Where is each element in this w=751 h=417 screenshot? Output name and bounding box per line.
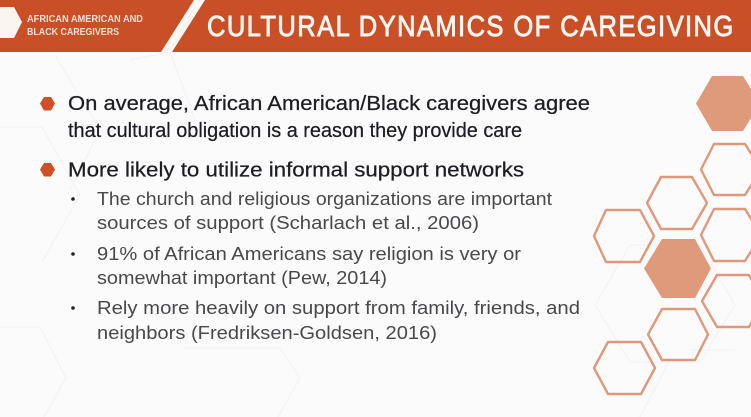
sub-bullet: religion: somewhat important (Pew, 2014)	[97, 268, 387, 288]
sub-bullet: church: The church and religious organizations are important	[97, 189, 552, 209]
section label: BLACK CAREGIVERS	[27, 26, 119, 38]
bullet: informal support networks: More likely to utilize informal support networks	[68, 160, 524, 182]
filled hexagons	[644, 76, 751, 298]
bullet: cultural obligation: that cultural obligation is a reason they provide care	[68, 120, 522, 142]
title: CULTURAL DYNAMICS OF CAREGIVING	[207, 9, 733, 42]
section label	[27, 13, 143, 38]
icon: hexagon bullet	[40, 97, 55, 110]
sub-bullet: family and friends: Rely more heavily on support from family, friends, and	[97, 298, 580, 318]
outlined hexagons	[594, 144, 751, 394]
bullet: cultural obligation: On average, African American/Black caregivers agree	[68, 93, 590, 115]
sub-bullet: family and friends: neighbors (Fredriksen-Goldsen, 2016)	[97, 323, 437, 343]
icon: hexagon bullet	[40, 163, 55, 176]
icon: white hexagon tag	[0, 7, 22, 38]
sub-bullet: family and friends	[71, 298, 580, 343]
sub-bullet: church: sources of support (Scharlach et al., 2006)	[97, 213, 479, 233]
section label: AFRICAN AMERICAN AND	[27, 13, 143, 25]
sub-bullet: church	[71, 189, 552, 233]
header banner	[0, 0, 751, 52]
bullet: cultural obligation	[40, 93, 590, 142]
sub-bullet: religion	[71, 244, 521, 288]
hexagon decoration	[594, 76, 751, 394]
diagonal divider	[161, 0, 205, 52]
sub-bullet: religion: 91% of African Americans say religion is very or	[97, 244, 521, 264]
